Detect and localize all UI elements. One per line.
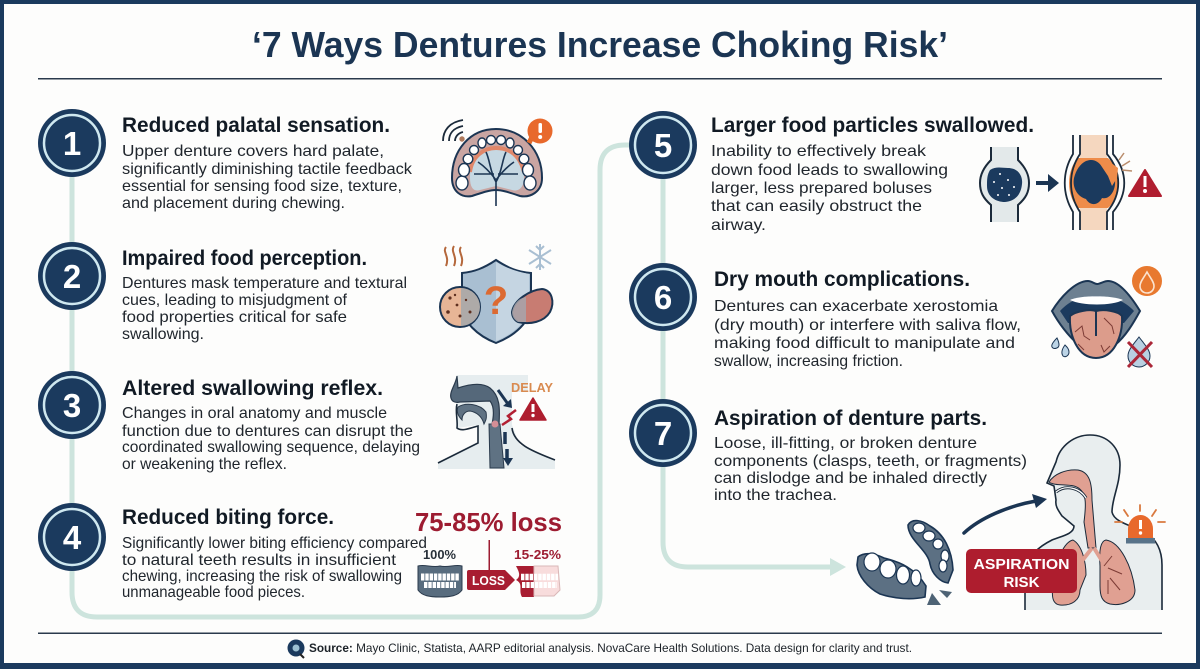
badge 6: [629, 263, 697, 331]
body 3: coordinated swallowing sequence, delaying: [122, 439, 420, 456]
body 5: larger, less prepared boluses: [711, 180, 932, 197]
title: ‘7 Ways Dentures Increase Choking Risk’: [252, 24, 948, 65]
body 6: (dry mouth) or interfere with saliva flow,: [714, 317, 1021, 334]
panel: step 4: [38, 503, 562, 601]
badge 4: [38, 503, 106, 571]
body 6: Dentures can exacerbate xerostomia: [714, 298, 998, 315]
body 5: airway.: [711, 217, 766, 234]
body 4: [122, 535, 427, 601]
body 7: Loose, ill-fitting, or broken denture: [714, 435, 977, 452]
body 4: to natural teeth results in insufficient: [122, 552, 397, 569]
badge 1: 1: [63, 125, 81, 162]
icon: shield with question mark: [440, 244, 552, 343]
panel: step 1: [38, 109, 552, 212]
body 2: Dentures mask temperature and textural: [122, 275, 407, 292]
badge 6: 6: [654, 279, 672, 316]
body 2: swallowing.: [122, 326, 204, 343]
body 4: unmanageable food pieces.: [122, 584, 305, 601]
body 2: cues, leading to misjudgment of: [122, 292, 348, 309]
panel: step 6: [629, 263, 1162, 370]
body 3: Changes in oral anatomy and muscle: [122, 405, 387, 422]
body 6: swallow, increasing friction.: [714, 353, 903, 370]
connector path: steps 1 to 7: [72, 145, 846, 617]
body 2: [122, 275, 407, 343]
badge 2: 2: [63, 258, 81, 295]
heading 3: Altered swallowing reflex.: [122, 376, 383, 400]
body 1: essential for sensing food size, texture,: [122, 178, 402, 195]
body 3: or weakening the reflex.: [122, 456, 287, 473]
chart: 75-85% loss comparison: 100%: [423, 547, 456, 562]
body 6: making food difficult to manipulate and: [714, 335, 1015, 352]
badge 3: [38, 371, 106, 439]
body 5: that can easily obstruct the: [711, 198, 922, 215]
footer: [38, 632, 1162, 658]
body 1: and placement during chewing.: [122, 195, 345, 212]
icon: person with lungs and aspiration risk: [857, 435, 1165, 610]
badge 7: 7: [654, 415, 672, 452]
heading 1: Reduced palatal sensation.: [122, 113, 390, 137]
panel: step 2: [38, 242, 552, 343]
body 4: Significantly lower biting efficiency compared: [122, 535, 427, 552]
icon: person with lungs and aspiration risk: RISK: [1004, 575, 1040, 591]
icon: food bolus blocking airway: [980, 135, 1161, 230]
icon: magnifier source: [288, 640, 304, 658]
heading 5: Larger food particles swallowed.: [711, 113, 1034, 137]
badge 1: [38, 109, 106, 177]
badge 5: [629, 111, 697, 179]
heading 6: Dry mouth complications.: [714, 267, 970, 291]
body 2: food properties critical for safe: [122, 309, 347, 326]
icon: throat with delayed reflex: [438, 375, 555, 469]
panel: step 5: [629, 111, 1161, 234]
body 3: [122, 405, 420, 473]
badge 4: 4: [63, 519, 82, 556]
body 1: [122, 143, 413, 212]
body 7: can dislodge and be inhaled directly: [714, 470, 987, 487]
heading 7: Aspiration of denture parts.: [714, 406, 987, 430]
icon: palate with teeth: [443, 118, 552, 206]
body 7: [714, 435, 1027, 504]
icon: broken denture pieces: [857, 521, 953, 605]
badge 3: 3: [63, 387, 81, 424]
body 7: into the trachea.: [714, 487, 837, 504]
badge 7: [629, 399, 697, 467]
chart: 75-85% loss comparison: LOSS: [472, 573, 505, 588]
body 1: significantly diminishing tactile feedback: [122, 161, 413, 178]
chart: 75-85% loss comparison: [415, 507, 562, 597]
body 5: Inability to effectively break: [711, 143, 927, 160]
heading 4: Reduced biting force.: [122, 505, 334, 529]
body 6: [714, 298, 1021, 370]
body 5: [711, 143, 948, 234]
icon: person with lungs and aspiration risk: ASPIRATION: [974, 557, 1070, 573]
icon: shield with question mark: ?: [484, 279, 508, 323]
body 4: chewing, increasing the risk of swallowing: [122, 568, 402, 585]
panel: step 3: [38, 371, 555, 473]
panel: step 7: [629, 399, 1165, 610]
body 7: components (clasps, teeth, or fragments): [714, 453, 1027, 470]
source text: Source: Mayo Clinic, Statista, AARP editorial analysis. NovaCare Health Solutions. Data design for clarity and trust.: [309, 641, 912, 655]
badge 5: 5: [654, 127, 672, 164]
body 1: Upper denture covers hard palate,: [122, 143, 384, 160]
heading 2: Impaired food perception.: [122, 246, 367, 270]
icon: dry mouth with cracked tongue: [1052, 266, 1162, 367]
body 3: function due to dentures can disrupt the: [122, 423, 413, 440]
chart: 75-85% loss comparison: 75-85% loss: [415, 507, 562, 537]
badge 2: [38, 242, 106, 310]
body 5: down food leads to swallowing: [711, 162, 948, 179]
icon: throat with delayed reflex: DELAY: [511, 381, 554, 395]
chart: 75-85% loss comparison: 15-25%: [514, 547, 561, 562]
